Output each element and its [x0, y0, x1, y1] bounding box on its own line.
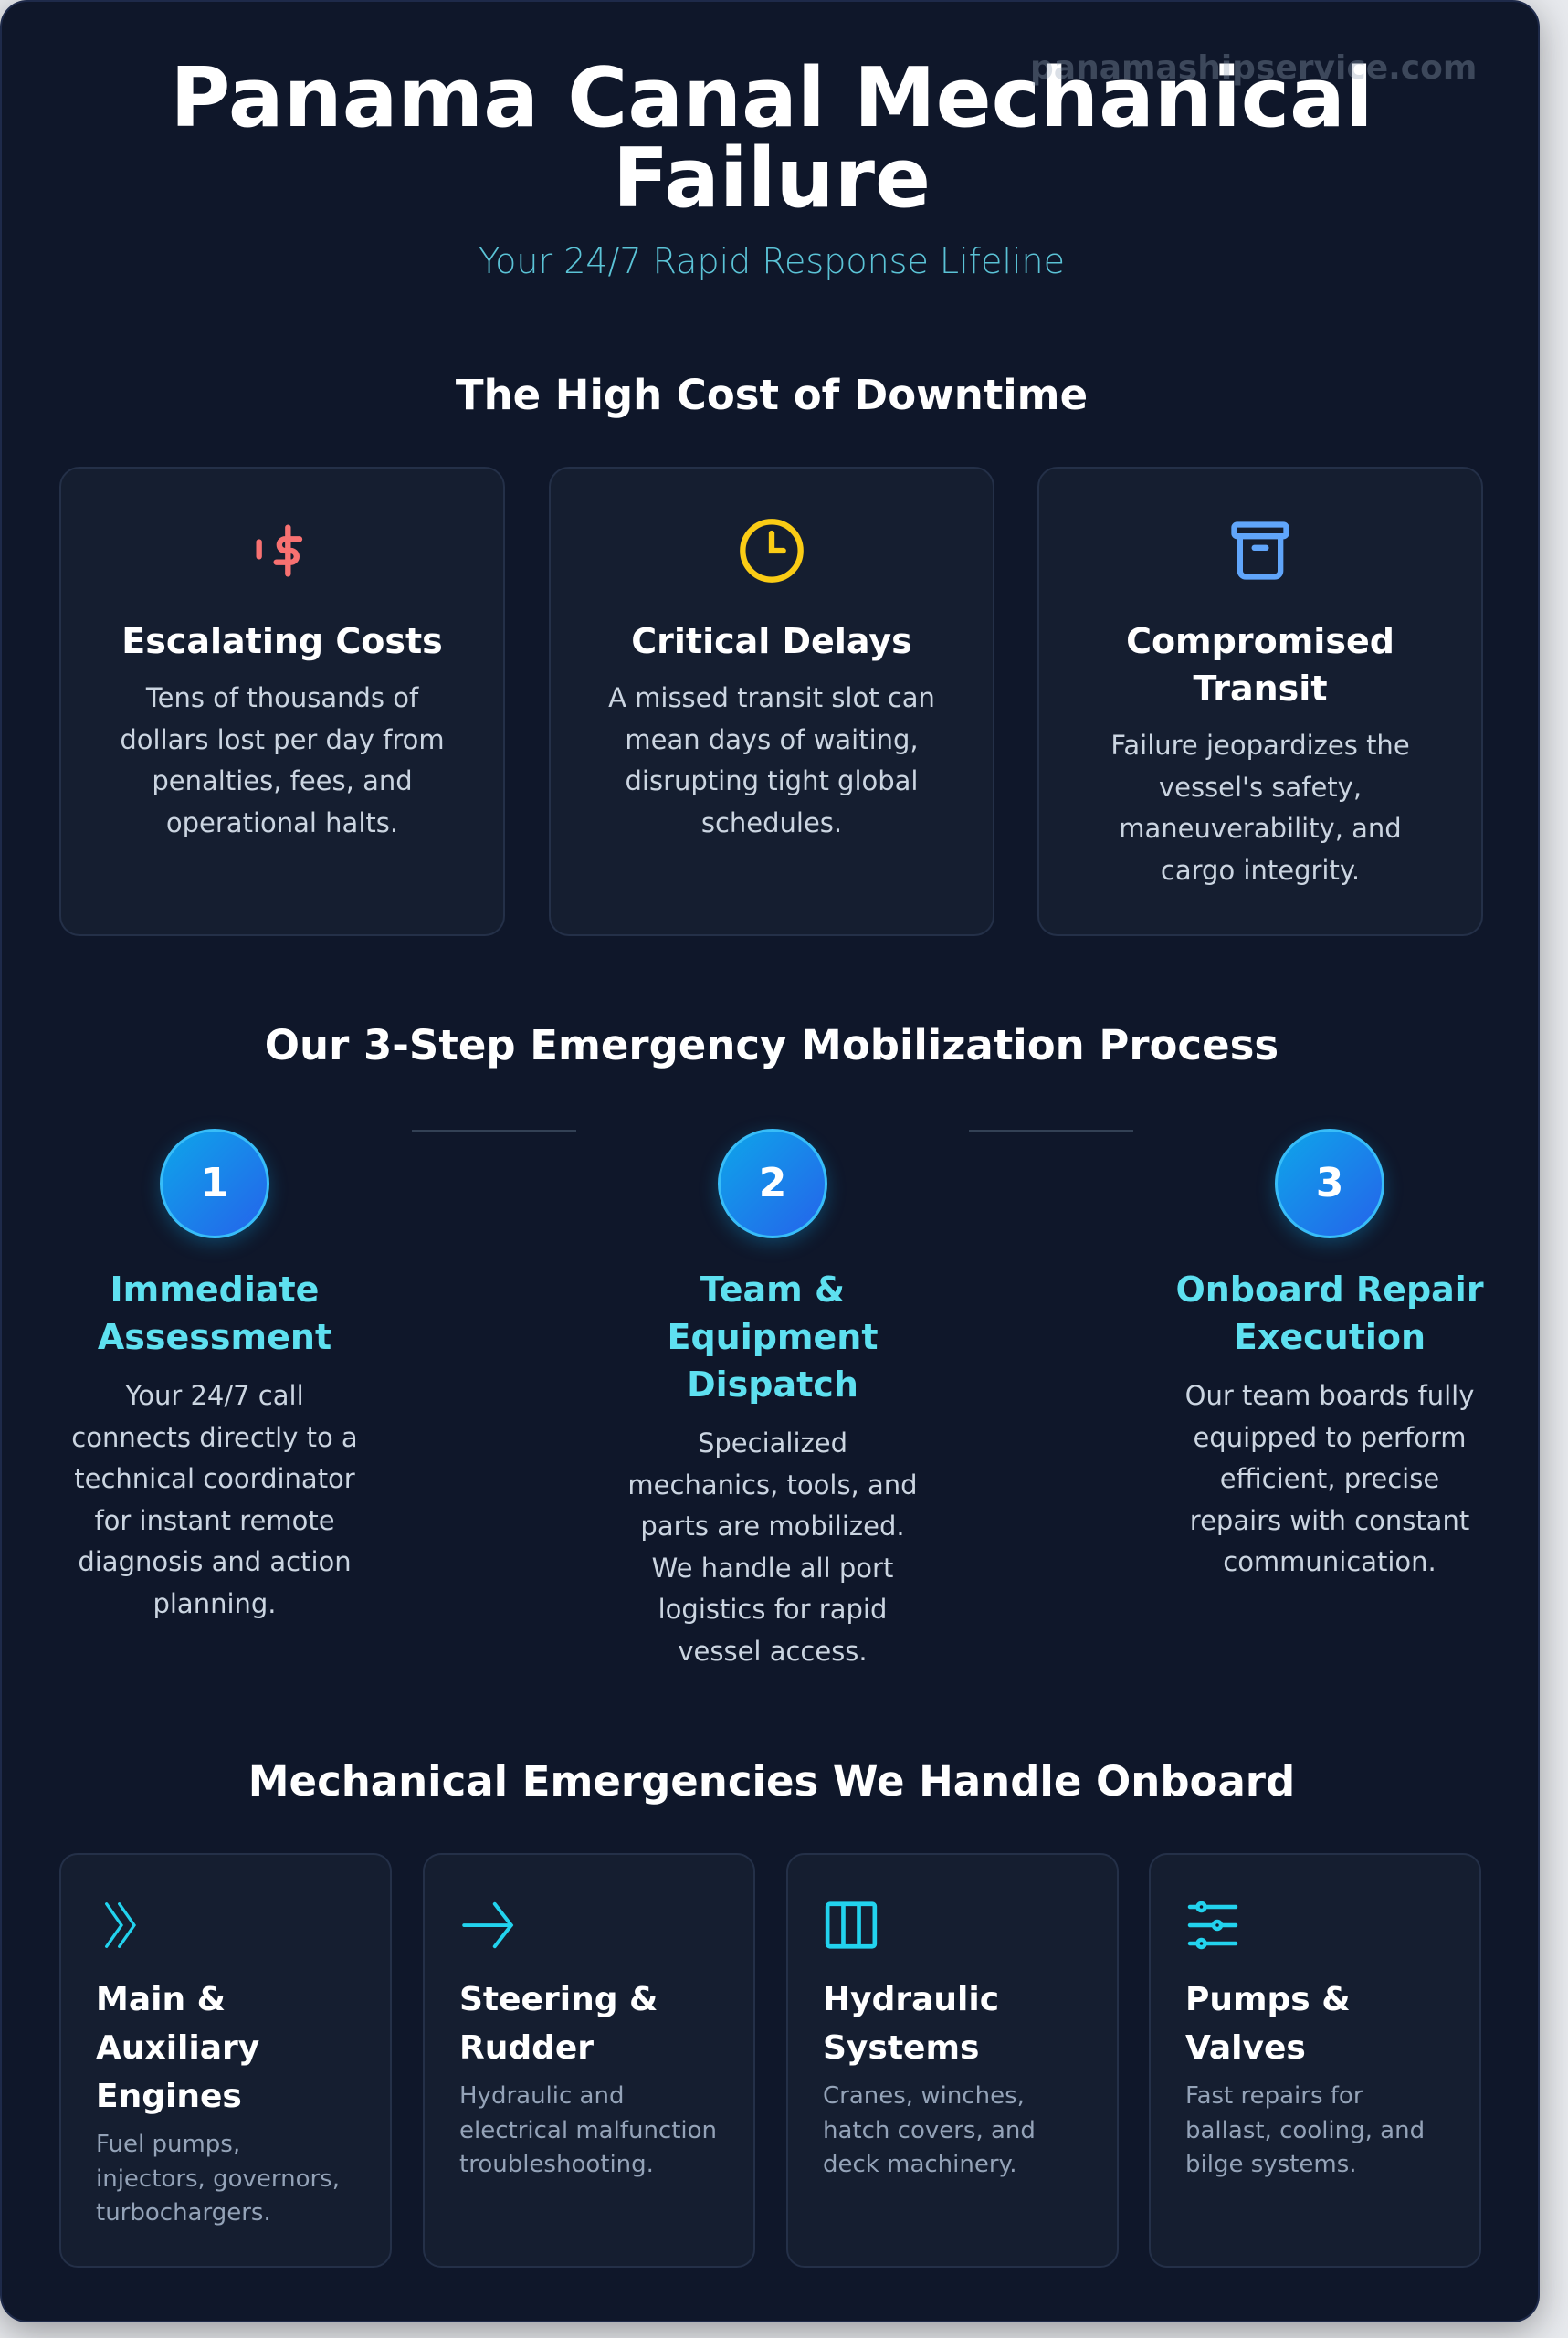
icon: arrow	[462, 1901, 513, 1949]
panel: steering: Steering & Rudder	[459, 1981, 658, 2067]
panel: hydraulic: Hydraulic Systems	[823, 1981, 999, 2067]
title	[170, 50, 1373, 226]
step 2 text	[627, 1269, 918, 1666]
panel: critical delays: A missed transit slot can mean days of waiting, disrupting tight global schedules.	[608, 682, 935, 838]
step 3 text: Our team boards fully equipped to perform efficient, precise repairs with constant communication.	[1185, 1380, 1474, 1577]
icon: sliders	[1187, 1901, 1238, 1949]
step 1 text: Your 24/7 call connects directly to a technical coordinator for instant remote diagnosis and action planning.	[71, 1380, 358, 1618]
panel: hydraulic	[786, 1853, 1119, 2268]
panel: hydraulic: Cranes, winches, hatch covers, and deck machinery.	[823, 2082, 1036, 2178]
watermark: panamashipservice.com	[1030, 49, 1477, 87]
panel: engines	[59, 1853, 392, 2268]
title: Panama Canal Mechanical	[170, 50, 1373, 146]
step 1 text	[71, 1269, 358, 1618]
step 2 circle	[718, 1129, 827, 1238]
panel: compromised transit	[1037, 467, 1483, 936]
panel: engines: Fuel pumps, injectors, governors, turbochargers.	[96, 2131, 340, 2227]
step 3 text: Onboard Repair Execution	[1175, 1269, 1484, 1357]
step 3 circle: 3	[1316, 1160, 1343, 1206]
step 2 circle: 2	[759, 1160, 786, 1206]
panel: escalating costs: Tens of thousands of dollars lost per day from penalties, fees, and operational halts.	[120, 682, 445, 838]
subtitle: Your 24/7 Rapid Response Lifeline	[479, 241, 1065, 281]
panel: critical delays	[549, 467, 994, 936]
panel: escalating costs	[59, 467, 505, 936]
icon: chevrons	[104, 1902, 136, 1948]
heading: process: Our 3-Step Emergency Mobilization Process	[265, 1021, 1279, 1069]
panel: critical delays: Critical Delays	[631, 621, 912, 661]
step 3 text	[1175, 1269, 1484, 1577]
panel: pumps: Pumps & Valves	[1185, 1981, 1351, 2067]
icon: dollar	[256, 524, 303, 577]
step 1 circle	[160, 1129, 269, 1238]
icon: columns	[826, 1901, 877, 1949]
panel: compromised transit: Compromised Transit	[1126, 621, 1394, 709]
panel: engines: Main & Auxiliary Engines	[96, 1981, 259, 2115]
step 1 text: Immediate Assessment	[98, 1269, 331, 1357]
step 3 circle	[1275, 1129, 1384, 1238]
icon: clock	[740, 519, 804, 583]
title: Failure	[613, 131, 931, 226]
step 1 circle: 1	[201, 1160, 228, 1206]
panel: escalating costs: Escalating Costs	[121, 621, 443, 661]
panel: steering: Hydraulic and electrical malfunction troubleshooting.	[459, 2082, 717, 2178]
heading: high cost: The High Cost of Downtime	[456, 371, 1088, 419]
panel: pumps: Fast repairs for ballast, cooling, and bilge systems.	[1185, 2082, 1425, 2178]
panel: pumps	[1149, 1853, 1481, 2268]
heading: emergencies: Mechanical Emergencies We Handle Onboard	[248, 1757, 1295, 1806]
step 2 text: Team & Equipment Dispatch	[667, 1269, 879, 1405]
panel: compromised transit: Failure jeopardizes the vessel's safety, maneuverability, and cargo integrity.	[1110, 730, 1410, 886]
icon: archive	[1231, 521, 1289, 580]
panel: steering	[423, 1853, 755, 2268]
step 2 text: Specialized mechanics, tools, and parts are mobilized. We handle all port logistics for rapid vessel access.	[627, 1427, 918, 1666]
